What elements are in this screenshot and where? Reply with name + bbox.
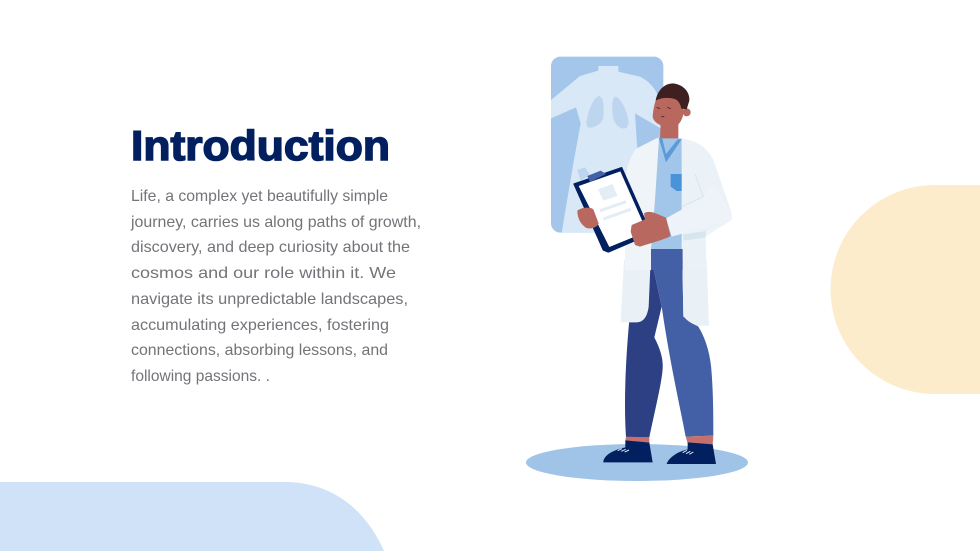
body text block: accumulating experiences, fostering bbox=[131, 317, 389, 334]
pants top bbox=[651, 249, 683, 270]
clipboard clip bbox=[587, 171, 606, 182]
front leg bbox=[652, 260, 713, 437]
x-ray left lung bbox=[586, 96, 604, 128]
clipboard text lines bbox=[600, 202, 631, 219]
head bbox=[653, 95, 684, 128]
left hand bbox=[577, 208, 599, 228]
illustration: floor ellipse bbox=[526, 444, 748, 481]
decorative blob: right cream bbox=[831, 185, 980, 394]
back leg bbox=[625, 260, 663, 437]
neck bbox=[660, 122, 678, 158]
coat back and left side bbox=[625, 137, 732, 270]
clipboard profile photo bbox=[598, 184, 617, 201]
ear bbox=[683, 108, 691, 116]
coat lower right panel bbox=[682, 260, 709, 326]
decorative blob: bottom-left blue bbox=[0, 482, 384, 551]
eyes and mouth bbox=[657, 107, 671, 117]
scrubs collar bbox=[659, 137, 682, 162]
sleeve bbox=[666, 183, 732, 237]
illustration: doctor upper body bbox=[574, 83, 732, 270]
shoe laces bbox=[618, 449, 693, 454]
coat right panel bbox=[682, 138, 732, 270]
x-ray body silhouette bbox=[551, 66, 663, 233]
x-ray hip highlight bbox=[577, 167, 590, 181]
body text block: navigate its unpredictable landscapes, bbox=[131, 291, 408, 308]
illustration: legs and shoes bbox=[603, 260, 716, 464]
right hand bbox=[631, 212, 671, 247]
shoes bbox=[603, 440, 716, 464]
illustration: x-ray panel bbox=[551, 57, 663, 233]
clipboard paper bbox=[579, 171, 647, 247]
body text block: connections, absorbing lessons, and bbox=[131, 342, 388, 359]
hair bbox=[656, 83, 689, 109]
body text block: cosmos and our role within it. We bbox=[131, 265, 396, 282]
clipboard bbox=[574, 168, 651, 252]
title: Introduction bbox=[131, 122, 390, 169]
body text block: Life, a complex yet beautifully simple bbox=[131, 188, 388, 205]
coat crease bbox=[682, 174, 703, 207]
coat lower left panel bbox=[621, 260, 651, 322]
scrubs pocket bbox=[671, 174, 682, 191]
body text block bbox=[130, 188, 421, 385]
body text block: discovery, and deep curiosity about the bbox=[131, 239, 410, 256]
body text block: journey, carries us along paths of growth, bbox=[130, 214, 421, 231]
ankles bbox=[625, 436, 713, 445]
scrubs bbox=[651, 138, 682, 249]
sleeve shadow bbox=[683, 231, 706, 241]
x-ray right lung bbox=[612, 97, 628, 128]
body text block: following passions. . bbox=[131, 368, 270, 385]
